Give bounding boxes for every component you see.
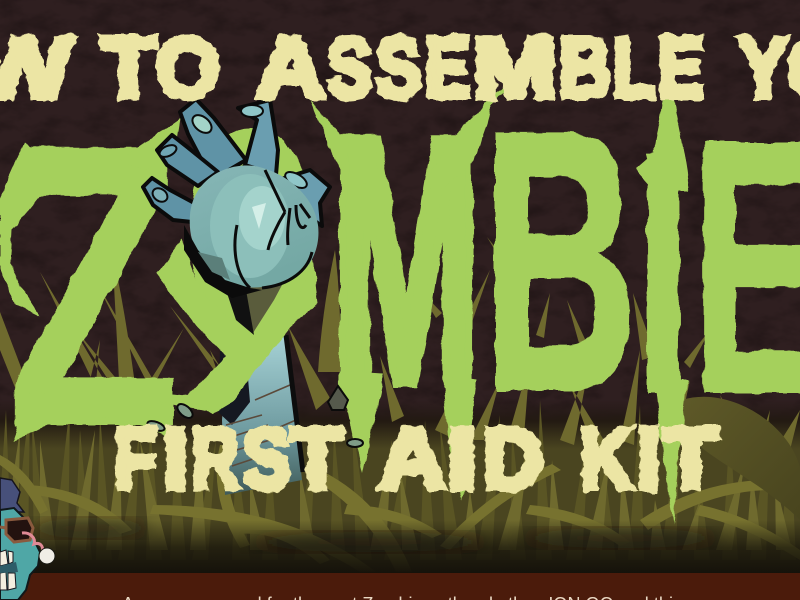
subheading: first aid kit: T	[291, 412, 343, 507]
finger: top right	[238, 100, 278, 175]
heading: how to assemble your: O	[156, 21, 219, 116]
teeth	[0, 550, 16, 590]
title word: ZOMBIES: I	[634, 81, 692, 466]
subheading: first aid kit: R	[192, 412, 239, 507]
subheading: first aid kit: S	[243, 412, 290, 507]
finger: top left	[180, 99, 246, 180]
title word: ZOMBIES: Z	[8, 62, 180, 509]
title word: ZOMBIES	[0, 55, 800, 525]
heading: how to assemble your: A	[256, 21, 325, 116]
large leaf at right	[682, 397, 800, 520]
white ball	[39, 548, 55, 564]
subheading: first aid kit: K	[580, 412, 633, 507]
long arching leaves	[0, 445, 800, 572]
subheading: first aid kit: I	[637, 412, 661, 507]
subheading: first aid kit: I	[163, 412, 188, 507]
small teardrop fingertips scattered around the letters	[146, 386, 363, 447]
heading: how to assemble your: B	[559, 21, 611, 116]
heading: how to assemble your: M	[473, 21, 557, 116]
heading: how to assemble your	[0, 21, 800, 116]
face	[0, 508, 40, 600]
zombie head peeking from the left	[0, 478, 55, 600]
finger: far left	[143, 178, 198, 222]
heading: how to assemble your: S	[376, 21, 421, 116]
glasses	[6, 518, 33, 542]
heading: how to assemble your: S	[327, 21, 372, 116]
subheading: first aid kit: D	[483, 412, 543, 507]
palm	[184, 165, 318, 298]
subheading: first aid kit: F	[114, 412, 157, 507]
subheading: first aid kit: T	[664, 412, 718, 507]
subheading: first aid kit: I	[447, 412, 477, 507]
heading: how to assemble your: T	[101, 21, 156, 116]
torn sleeve	[218, 350, 250, 425]
middle grass blades	[0, 237, 800, 472]
title word: ZOMBIES: M	[331, 66, 481, 457]
notch between wrist and O	[222, 278, 282, 335]
subheading: first aid kit	[114, 412, 718, 507]
zombie arm rising behind the O	[218, 335, 303, 495]
heading: how to assemble your: L	[613, 21, 655, 116]
black stripe on arm	[286, 335, 303, 472]
heading: how to assemble your: E	[425, 21, 470, 116]
banner band with intro text	[0, 573, 800, 600]
zombie hand icon	[143, 99, 330, 335]
subheading: first aid kit: A	[378, 412, 446, 507]
title word: ZOMBIES: O	[186, 70, 318, 394]
thumb	[278, 169, 330, 226]
finger: middle left	[157, 135, 218, 186]
heading: how to assemble your: E	[658, 21, 704, 116]
dark ground fade above the banner	[0, 518, 800, 575]
heading: how to assemble your: Y	[738, 21, 788, 116]
drips and spikes on the letters	[130, 238, 319, 414]
grass field	[0, 237, 800, 575]
title word: ZOMBIES: B	[482, 55, 638, 466]
hair	[0, 478, 24, 516]
eye worm	[22, 533, 43, 552]
back grass blades	[0, 400, 796, 560]
